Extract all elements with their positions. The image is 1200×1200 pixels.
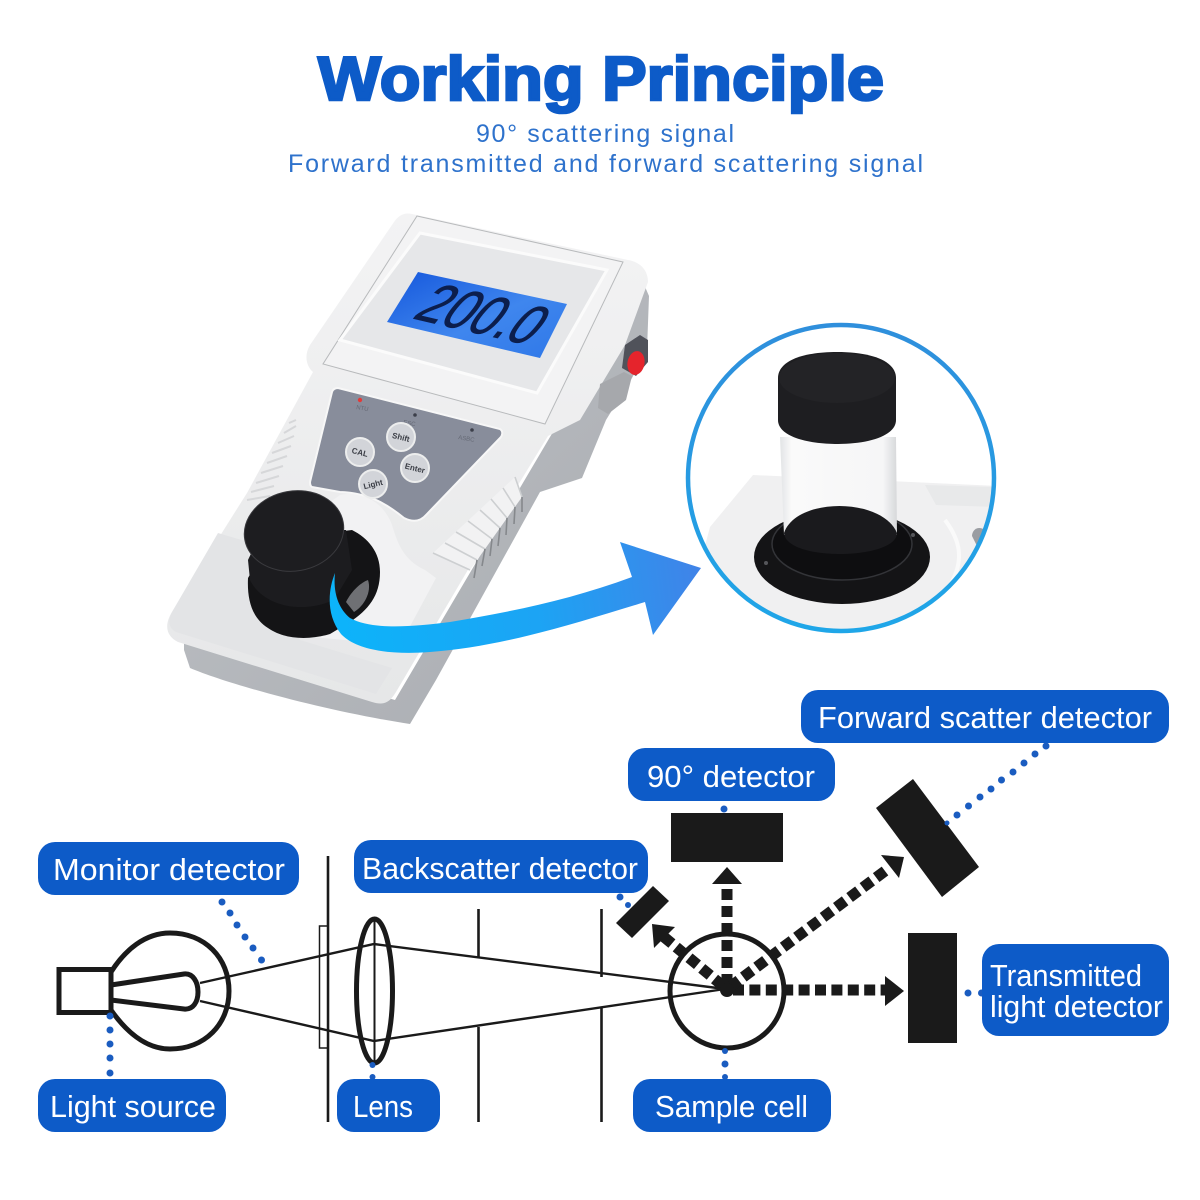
subtitle block [288, 120, 923, 178]
knob cap [238, 483, 350, 579]
backscatter arrow [652, 924, 723, 986]
circle interior background [687, 324, 995, 632]
backscatter detector [616, 886, 669, 938]
label: 90° detector: 90° detector [647, 759, 815, 794]
glass vial [780, 437, 897, 535]
label: Backscatter detector: Backscatter detector [362, 851, 638, 886]
flange holes [764, 533, 915, 565]
inner ring [772, 508, 912, 580]
side clip and power button [598, 335, 648, 414]
right grip ribs [433, 477, 522, 578]
lens leader [370, 1062, 376, 1080]
flange [754, 510, 930, 604]
label: 90° detector [628, 748, 835, 801]
optical diagram [59, 779, 979, 1122]
transmitted leader [964, 990, 985, 996]
label: Transmitted light detector: Transmitted [990, 958, 1142, 993]
status LEDs [356, 398, 475, 444]
vial cap [778, 352, 896, 444]
label: Backscatter detector [354, 840, 648, 893]
90 degree detector [671, 813, 783, 862]
magnified sample cell circle [680, 324, 1000, 640]
monitor detector leader [218, 898, 265, 964]
label: Forward scatter detector [801, 690, 1169, 743]
knob ring highlight [346, 580, 369, 612]
label: Transmitted light detector [982, 944, 1169, 1036]
cap top [779, 353, 895, 403]
subtitle line 2: Forward transmitted and forward scattering signal [288, 150, 923, 178]
LCD reading: 200.0 [402, 273, 564, 356]
device white body [167, 213, 648, 704]
dotted leader lines [106, 742, 1050, 1080]
button: Shift [387, 423, 415, 451]
sample cell [670, 934, 784, 1048]
monitor slit [320, 926, 328, 1048]
knob cylinder [248, 530, 352, 607]
bulb glass [111, 933, 229, 1049]
transmitted light detector [908, 933, 957, 1043]
lid recess [340, 233, 607, 393]
label: Monitor detector [38, 842, 299, 895]
LCD screen [387, 272, 567, 358]
subtitle line 1: 90° scattering signal [476, 120, 734, 148]
button: Shift: Shift [391, 431, 411, 444]
label: Lens [337, 1079, 440, 1132]
transmitted arrow [733, 976, 904, 1006]
label: Forward scatter detector: Forward scatter detector [818, 700, 1152, 735]
label: Lens: Lens [353, 1089, 413, 1124]
sample cell leader [722, 1048, 728, 1080]
status LEDs: NTU [356, 405, 369, 413]
lens [356, 919, 392, 1063]
lid [323, 216, 623, 424]
wall and aperture lines [328, 856, 602, 1122]
light source bulb [59, 933, 229, 1049]
light rays [200, 944, 725, 1041]
90 degree leader [720, 806, 728, 812]
left grip ribs [247, 420, 296, 500]
label: Sample cell [633, 1079, 831, 1132]
title: Working Principle [318, 45, 884, 114]
bulb base [59, 970, 111, 1012]
sample point [720, 983, 734, 997]
label: Transmitted light detector: light detector [990, 989, 1163, 1024]
label: Light source: Light source [50, 1089, 216, 1124]
label: Light source [38, 1079, 226, 1132]
button: Enter [401, 454, 429, 482]
curved blue arrow [330, 542, 701, 653]
device photo: handheld turbidity meter [167, 213, 701, 724]
keypad panel [310, 388, 502, 521]
device grey side shell [184, 275, 649, 724]
backscatter leader [616, 894, 631, 908]
filament [111, 974, 198, 1009]
button: CAL: CAL [351, 446, 369, 459]
forward arrow [730, 855, 904, 987]
ring stroke [688, 325, 994, 631]
button: Enter: Enter [404, 462, 426, 475]
button: Light [359, 470, 387, 498]
status LEDs: ASBC [458, 435, 475, 444]
lower raised section [169, 533, 392, 694]
light source leader [106, 1012, 114, 1076]
sediment [784, 506, 897, 554]
forward scatter leader [944, 742, 1050, 826]
90 degree arrow [712, 867, 742, 985]
button: Light: Light [363, 478, 384, 491]
device surface [706, 475, 992, 628]
label: Monitor detector: Monitor detector [53, 852, 285, 887]
status LEDs: ESC [403, 420, 417, 428]
knob recess [250, 494, 436, 645]
button: CAL [346, 438, 374, 466]
label: Sample cell: Sample cell [655, 1089, 808, 1124]
knob base [248, 530, 380, 638]
forward scatter detector [876, 779, 979, 897]
